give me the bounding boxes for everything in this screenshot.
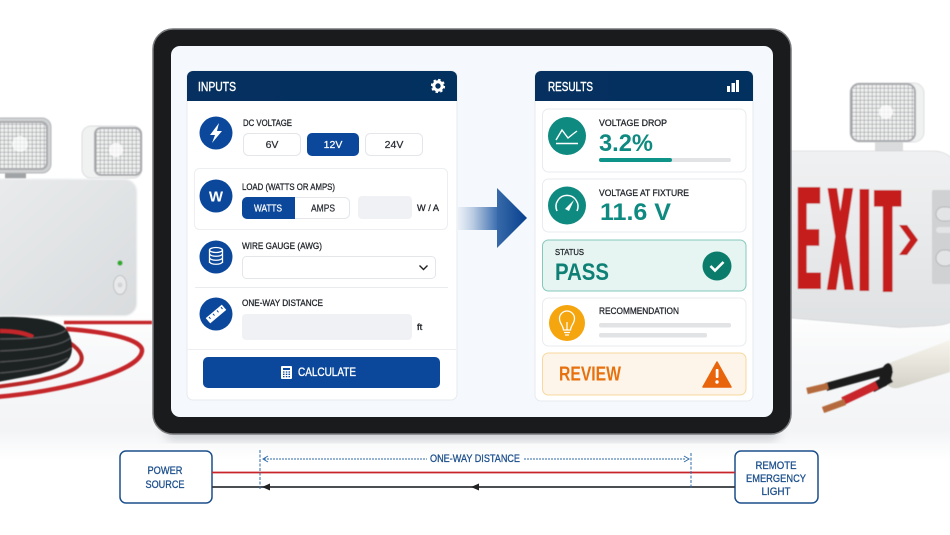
unit: ft: ft: [417, 322, 423, 333]
row: one-way distance: [200, 298, 423, 340]
value: 11.6 V: 11.6 V: [600, 199, 672, 226]
circuit diagram: [120, 450, 818, 503]
icon: check: [702, 252, 732, 280]
EXIT lettering: T: [876, 158, 900, 323]
arrow: inputs to results: [458, 188, 527, 248]
button: 24V: 24V: [385, 139, 403, 151]
exit lamp head: [850, 83, 924, 153]
label: dc voltage: DC VOLTAGE: [243, 118, 292, 129]
box: remote emergency light: REMOTE: [756, 460, 796, 472]
label: voltage at fixture: VOLTAGE AT FIXTURE: [599, 188, 689, 199]
progress bar: [599, 158, 731, 162]
box: power source: SOURCE: [146, 479, 184, 491]
EXIT lettering: E: [798, 155, 820, 321]
value: 3.2%: 3.2%: [599, 130, 653, 157]
button: calculate: CALCULATE: [298, 365, 356, 379]
unit: W / A: W / A: [417, 203, 440, 214]
panel: inputs: [187, 71, 457, 400]
toggle: watts or amps: [242, 197, 350, 219]
box: remote emergency light: EMERGENCY: [746, 473, 807, 485]
EXIT lettering: I: [859, 157, 870, 322]
one-way distance dimension: [260, 450, 691, 489]
card: recommendation: [542, 298, 746, 346]
test button: [114, 276, 126, 294]
button: 6V: [244, 134, 300, 156]
card: status: [542, 240, 746, 291]
button: 12V: [307, 133, 359, 156]
black wire with arrows: [212, 484, 735, 490]
button: 24V: [366, 134, 422, 156]
light housing: [0, 179, 137, 316]
status LED: [117, 260, 123, 266]
card: voltage drop: [542, 109, 746, 172]
label: recommendation: RECOMMENDATION: [599, 306, 679, 317]
icon: trend line: [548, 117, 586, 155]
toggle: watts or amps: WATTS: [254, 204, 282, 214]
box: remote emergency light: [735, 451, 818, 503]
icon: calculator: [281, 366, 292, 379]
results header: [535, 71, 753, 101]
label: wire gauge: WIRE GAUGE (AWG): [242, 241, 322, 252]
select: wire gauge: [242, 256, 436, 278]
row: dc voltage: [200, 116, 422, 156]
results header: RESULTS: [548, 80, 593, 94]
load input: [358, 196, 412, 219]
icon: warning: [703, 362, 731, 387]
panel: results: [535, 71, 753, 401]
icon: gauge: [548, 186, 586, 224]
label: voltage drop: VOLTAGE DROP: [599, 118, 667, 129]
right lamp head: [82, 126, 142, 183]
direction chevron: [899, 225, 918, 255]
icon: wire spool: [200, 240, 232, 274]
placeholder lines: [599, 323, 731, 338]
EXIT lettering: [798, 155, 900, 323]
box: power source: POWER: [148, 465, 183, 477]
tablet: [153, 29, 791, 434]
box: power source: [120, 451, 212, 503]
side controls: [932, 190, 950, 284]
stripped cable: [807, 340, 950, 410]
box: remote emergency light: LIGHT: [762, 486, 791, 498]
EXIT lettering: X: [828, 157, 852, 322]
tablet screen: [171, 46, 773, 417]
toggle: watts or amps: AMPS: [311, 204, 335, 214]
tablet shadow: [165, 425, 779, 441]
icon: bars: [727, 80, 739, 92]
row: load: [194, 168, 448, 230]
left lamp head: [0, 118, 51, 181]
icon: light bulb: [549, 305, 585, 341]
right exit sign: [780, 83, 950, 328]
row: wire gauge: [200, 240, 436, 278]
icon: bolt: [200, 116, 232, 150]
card: voltage at fixture: [542, 179, 746, 232]
button: 6V: 6V: [266, 139, 278, 151]
exit housing: [780, 151, 950, 328]
left emergency light unit: [0, 118, 142, 316]
red and black cable coil: [0, 317, 152, 397]
icon: W: W: [209, 188, 224, 206]
distance input: [242, 314, 412, 340]
icon: ruler: [200, 298, 232, 330]
card: review: [542, 353, 746, 395]
icon: gear: [432, 80, 444, 92]
inputs header: INPUTS: [198, 80, 236, 94]
value: pass: PASS: [555, 259, 609, 286]
icon: W: [200, 180, 232, 212]
one-way distance dimension: ONE-WAY DISTANCE: [430, 453, 520, 465]
red wire: [212, 472, 735, 474]
label: load: LOAD (WATTS OR AMPS): [242, 182, 335, 193]
value: review: REVIEW: [559, 364, 621, 386]
label: one-way distance: ONE-WAY DISTANCE: [242, 298, 323, 309]
button: calculate: [203, 357, 440, 388]
button: 12V: 12V: [324, 139, 342, 151]
inputs header: [187, 71, 457, 101]
label: status: STATUS: [555, 247, 584, 257]
